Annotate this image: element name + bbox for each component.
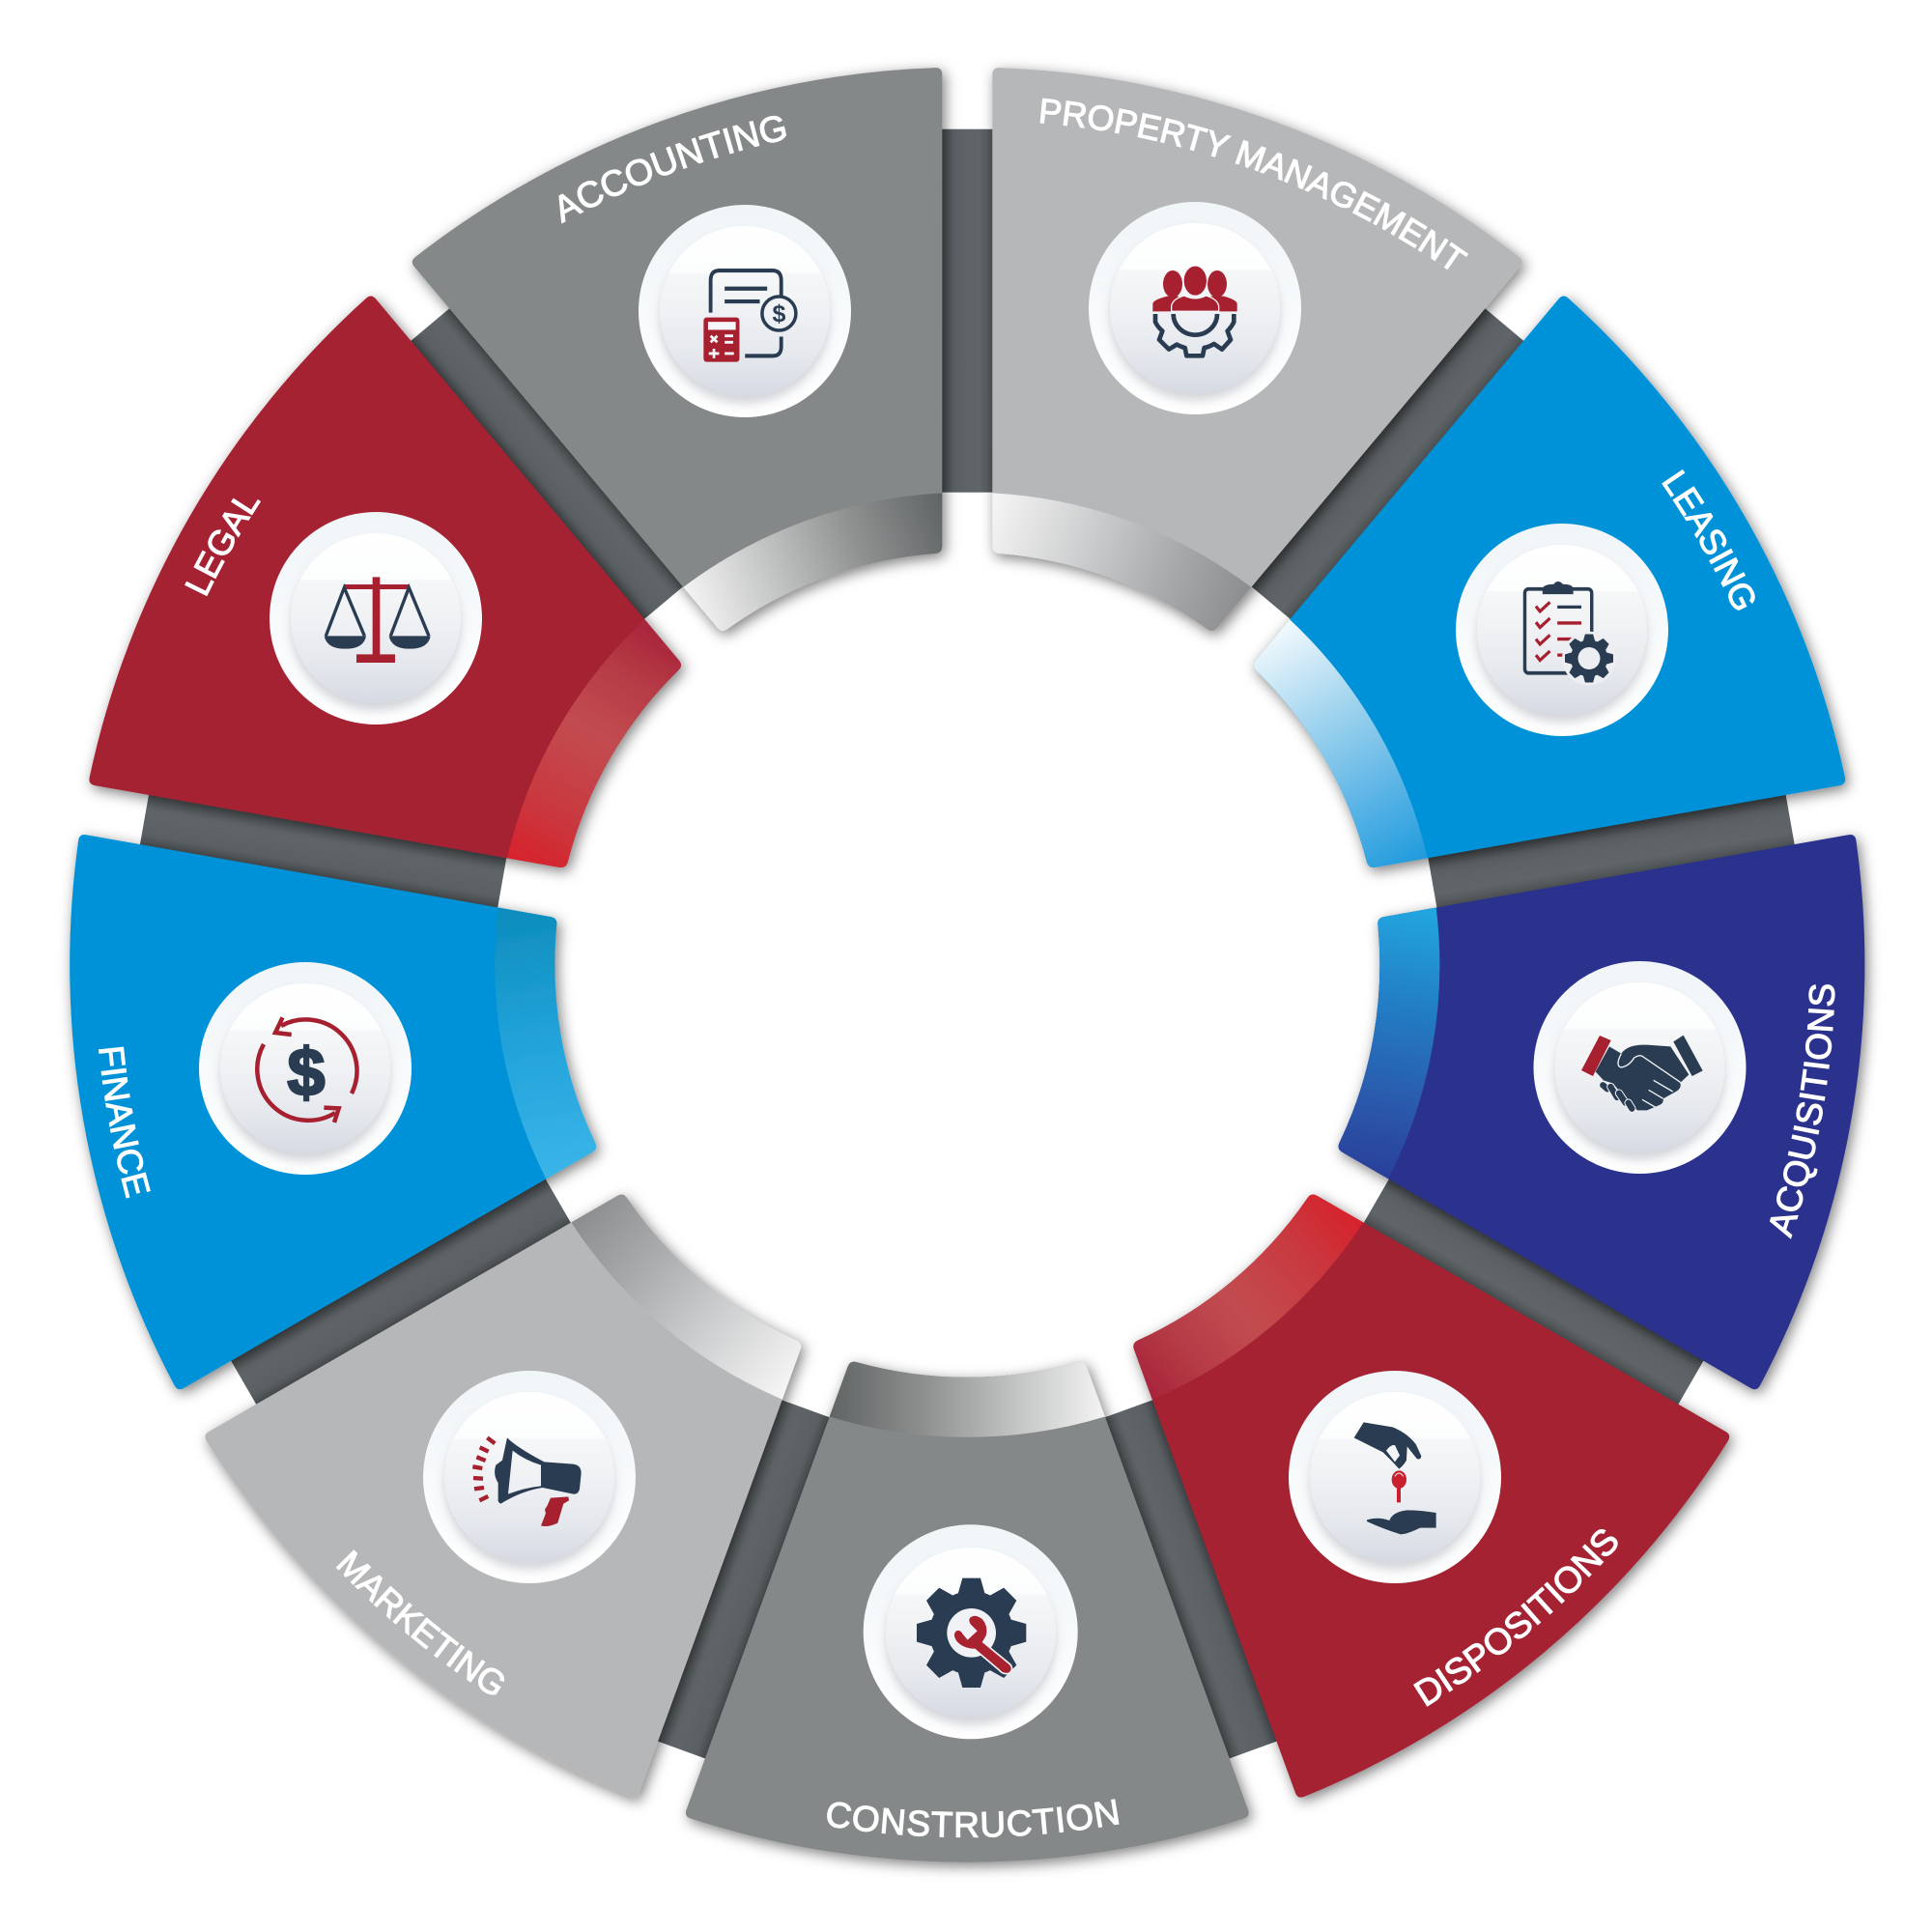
label: property management: PROPERTY MANAGEMENT: [1039, 99, 1468, 270]
wedge: accounting: [396, 25, 1096, 688]
panel: leasing: [1248, 292, 1857, 880]
wedge: property management: [838, 25, 1539, 688]
icon: dollar cycle: [199, 962, 412, 1175]
wedge: legal: [49, 272, 764, 1010]
panel: legal: [83, 292, 692, 880]
panel: construction: [680, 1357, 1260, 1876]
label: leasing: LEASING: [1662, 469, 1755, 611]
icon: people over gear: [1089, 202, 1301, 414]
label: marketing: MARKETING: [336, 1549, 504, 1694]
wedge: construction: [686, 1362, 1249, 1862]
icon: handshake: [1534, 961, 1747, 1174]
label: construction: CONSTRUCTION: [827, 1799, 1119, 1837]
label: accounting: ACCOUNTING: [558, 116, 786, 224]
wedge: acquisitions: [1309, 756, 1900, 1398]
panel: marketing: [201, 1190, 812, 1809]
wedge: finance: [35, 756, 625, 1398]
icon: megaphone: [423, 1371, 636, 1583]
icon: gear with wrench: [864, 1524, 1078, 1739]
icon: document and calculator: [639, 205, 851, 417]
icon: dollar cycle: $: [288, 1035, 325, 1110]
label: legal: LEGAL: [185, 498, 261, 597]
wedge: dispositions: [1007, 1088, 1760, 1833]
icon: clipboard with gear: [1456, 524, 1668, 736]
panel: acquisitions: [1333, 830, 1878, 1401]
panel: property management: [985, 62, 1532, 642]
wedge: leasing: [1170, 272, 1886, 1010]
label: finance: FINANCE: [99, 1047, 151, 1198]
label: dispositions: DISPOSITIONS: [1413, 1529, 1618, 1707]
icon: document and calculator: $: [772, 300, 785, 327]
wedge: marketing: [175, 1088, 927, 1833]
icon: scales of justice: [270, 512, 482, 724]
label: acquisitions: ACQUISITIONS: [1770, 984, 1835, 1239]
panel: accounting: [408, 62, 954, 642]
panel: dispositions: [1128, 1190, 1740, 1809]
panel: finance: [63, 830, 607, 1401]
dark connector bands between wedges: [139, 129, 1795, 1760]
icon: hand passing key: [1289, 1371, 1501, 1583]
